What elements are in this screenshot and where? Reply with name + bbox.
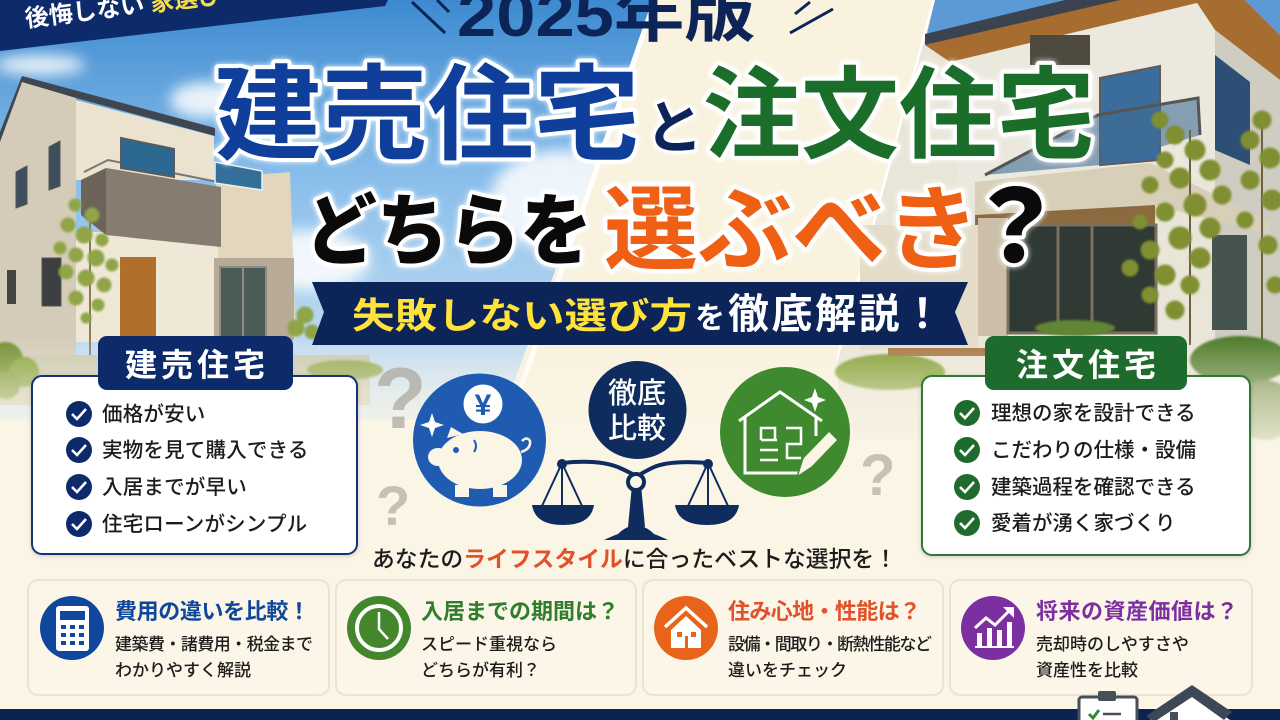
- main title: ？: [965, 172, 1065, 284]
- card: time to move in: スピード重視なら: [421, 635, 557, 654]
- checklist: 価格が安い: [102, 403, 206, 426]
- fade to cream: [0, 335, 1280, 470]
- icon: house plan and pencil: [720, 367, 850, 497]
- tagline: あなたのライフスタイルに合ったベストな選択を！: [372, 546, 897, 572]
- main title: 建売住宅: [215, 58, 640, 174]
- main title: と: [645, 96, 703, 161]
- card: cost: 建築費・諸費用・税金まで: [115, 635, 313, 654]
- card: time to move in: 入居までの期間は？: [421, 599, 619, 624]
- question marks: ?: [374, 351, 427, 447]
- subtitle ribbon: を: [695, 302, 725, 335]
- top-left ribbon: [0, 0, 388, 51]
- card: comfort: [643, 580, 943, 695]
- checklist: [66, 401, 309, 537]
- subtitle ribbon: [312, 282, 968, 345]
- icon: calculator: [40, 596, 104, 660]
- icon: scale with comparison label: [532, 361, 739, 540]
- card: comfort: 違いをチェック: [728, 661, 847, 680]
- checklist: 実物を見て購入できる: [102, 439, 309, 462]
- card: asset value: 資産性を比較: [1036, 661, 1138, 680]
- subtitle ribbon: 徹底解説！: [728, 291, 943, 337]
- panel: custom-built house: [922, 336, 1250, 555]
- main title: 選ぶべき: [604, 180, 980, 282]
- icon: home: [654, 596, 718, 660]
- icon: small house: [1146, 685, 1232, 720]
- photo: custom-built house: [835, 0, 1280, 440]
- icon: scale with comparison label: 比較: [608, 412, 666, 445]
- checklist: 建築過程を確認できる: [991, 476, 1196, 499]
- checklist: 理想の家を設計できる: [991, 402, 1196, 425]
- card: asset value: 売却時のしやすさや: [1036, 635, 1189, 654]
- question marks: [374, 351, 895, 537]
- card: asset value: 将来の資産価値は？: [1036, 599, 1238, 624]
- card: cost: 費用の違いを比較！: [115, 599, 310, 624]
- icon: piggy bank: [413, 374, 546, 506]
- photo: ready-built house: [0, 76, 383, 405]
- checklist: こだわりの仕様・設備: [991, 439, 1196, 462]
- subtitle ribbon: 失敗しない選び方: [352, 295, 692, 336]
- main title: どちらを: [305, 187, 592, 275]
- panel: ready-built house: [32, 336, 357, 554]
- card: cost: わかりやすく解説: [115, 661, 251, 680]
- card: asset value: [950, 580, 1252, 695]
- checklist: 愛着が湧く家づくり: [991, 512, 1176, 535]
- card: comfort: 設備・間取り・断熱性能など: [728, 635, 932, 654]
- checklist: 住宅ローンがシンプル: [102, 513, 307, 536]
- icon: growth chart: [961, 596, 1025, 660]
- panel heading: 建売住宅: [125, 347, 269, 383]
- panel heading: [985, 336, 1187, 390]
- icon: scale with comparison label: 徹底: [608, 377, 666, 410]
- main title: 注文住宅: [703, 60, 1095, 172]
- icon: clock: [347, 596, 411, 660]
- panel heading: [98, 336, 293, 390]
- panel heading: 注文住宅: [1016, 347, 1160, 383]
- question marks: ?: [860, 443, 895, 508]
- centre diagonal band: [500, 0, 935, 420]
- heading: 2025 edition: [412, 0, 833, 50]
- card: comfort: 住み心地・性能は？: [728, 599, 921, 624]
- checklist: [954, 400, 1196, 536]
- footer bar: [0, 709, 1280, 720]
- card: time to move in: どちらが有利？: [421, 660, 540, 680]
- icon: clipboard: [1079, 691, 1137, 720]
- card: time to move in: [336, 580, 636, 695]
- card: cost: [28, 580, 329, 695]
- checklist: 入居までが早い: [102, 476, 247, 499]
- main title: [215, 58, 1095, 284]
- icon: piggy bank: ¥: [475, 389, 492, 422]
- question marks: ?: [376, 474, 410, 537]
